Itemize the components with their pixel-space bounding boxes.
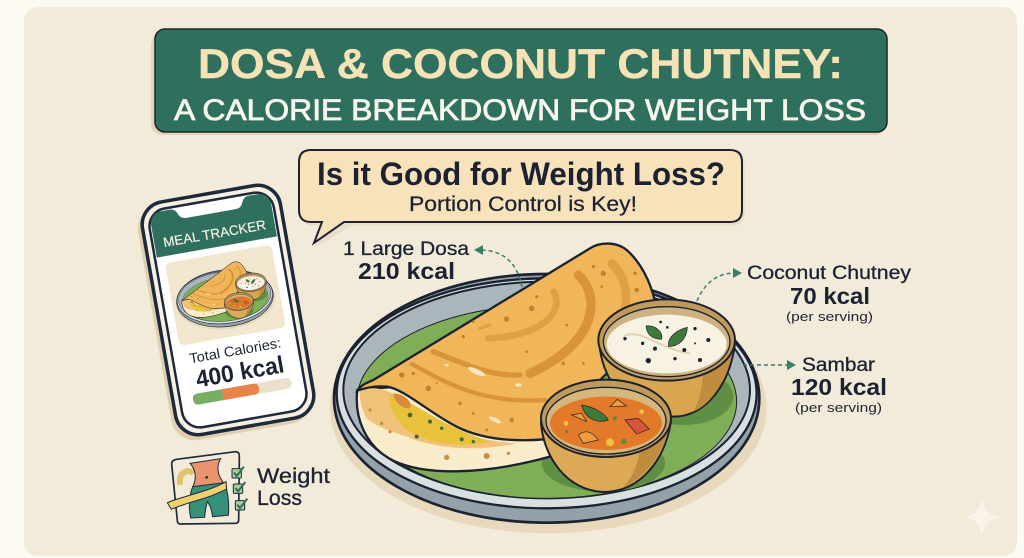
label: coconut chutney: Coconut Chutney: [747, 263, 912, 284]
phone: meal tracker: [134, 182, 318, 444]
weight loss label: Weight: [257, 464, 330, 488]
total calories label: Total Calories:: [188, 334, 282, 366]
progress bar: [192, 377, 293, 405]
thumbnail panel: [165, 244, 286, 346]
label: sambar: Sambar: [802, 355, 876, 376]
thumbnail of the meal: [172, 258, 278, 334]
label: sambar: [791, 355, 887, 415]
title banner: [151, 29, 887, 135]
weight loss label: [257, 464, 330, 510]
icon: sparkle watermark: [964, 498, 1000, 536]
speech bubble callout: Is it Good for Weight Loss?: [317, 156, 725, 192]
arrow: dosa label: [474, 245, 522, 287]
icon: weight loss waist and checklist: [167, 452, 247, 524]
speech bubble callout: [299, 150, 745, 247]
plate: [330, 274, 767, 533]
phone header: [149, 192, 277, 258]
label: sambar: 120 kcal: [791, 374, 887, 400]
label: coconut chutney: [747, 263, 912, 324]
title banner: DOSA & COCONUT CHUTNEY:: [198, 40, 843, 87]
label: 1 large dosa: 1 Large Dosa: [343, 238, 469, 260]
phone header label: MEAL TRACKER: [162, 217, 267, 250]
label: 1 large dosa: 210 kcal: [358, 258, 455, 284]
speech bubble callout: Portion Control is Key!: [409, 193, 637, 216]
label: coconut chutney: (per serving): [786, 309, 873, 324]
label: 1 large dosa: [343, 238, 469, 284]
arrow: sambar label: [743, 360, 796, 370]
weight loss label: Loss: [257, 486, 302, 510]
meal illustration: plate with dosa, chutney and sambar: [330, 244, 767, 533]
label: sambar: (per serving): [795, 400, 882, 415]
label: coconut chutney: 70 kcal: [790, 283, 870, 309]
arrow: coconut chutney label: [697, 268, 742, 301]
dosa: [357, 244, 655, 471]
total calories value: 400 kcal: [194, 351, 286, 393]
title banner: A CALORIE BREAKDOWN FOR WEIGHT LOSS: [174, 94, 866, 127]
bowl of coconut chutney: [598, 299, 735, 417]
bowl of sambar: [541, 380, 671, 492]
